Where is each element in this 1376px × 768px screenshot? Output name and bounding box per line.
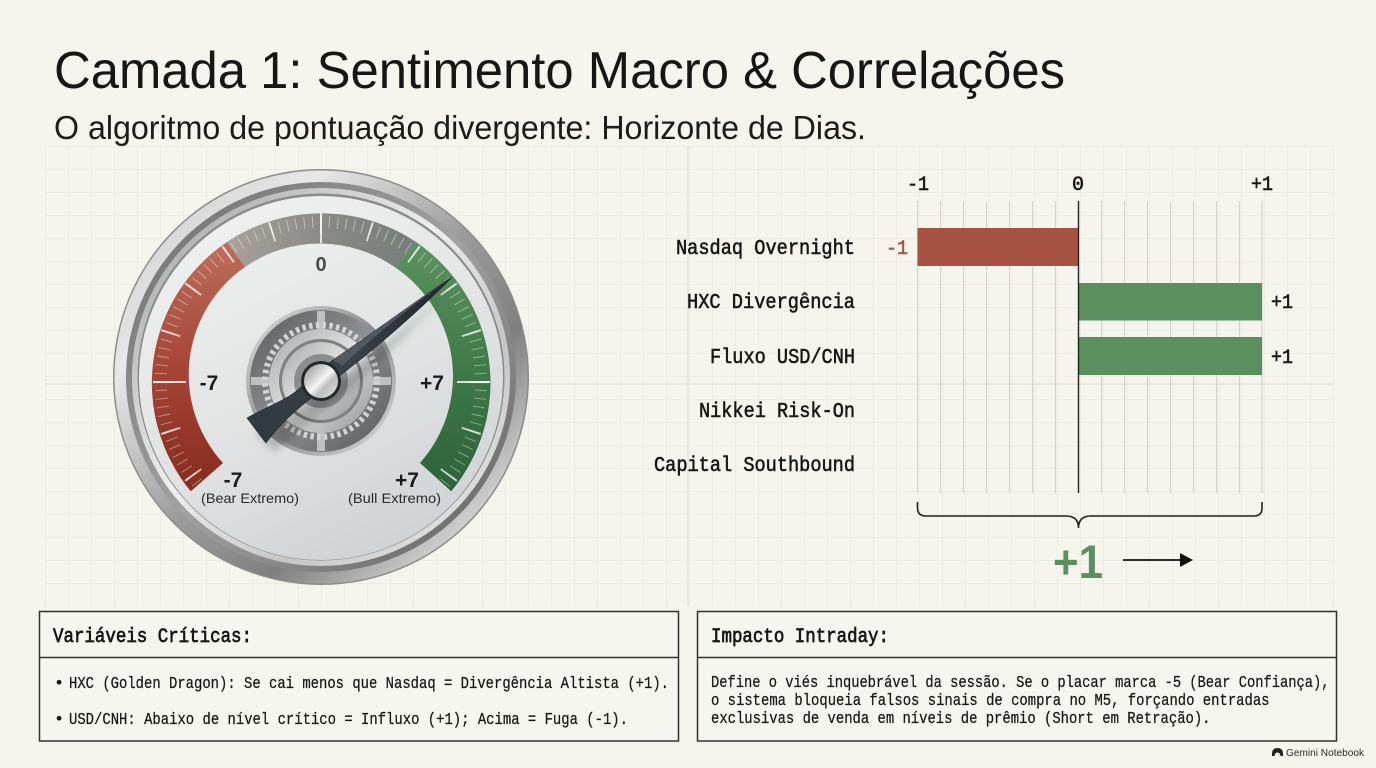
bar: USD/CNH positive: [1078, 337, 1262, 375]
gauge face: [139, 196, 503, 560]
panel heading: impact: Impacto Intraday:: [711, 626, 889, 649]
chart row labels: HXC Divergência: [687, 292, 855, 315]
variables list: •: [54, 675, 64, 694]
variables list: [54, 675, 669, 730]
chart: score bars: [654, 174, 1293, 588]
impact paragraph: o sistema bloqueia falsos sinais de compra no M5, forçando entradas: [711, 692, 1270, 711]
chart row labels: Nikkei Risk-On: [699, 401, 855, 424]
chart axis labels: -1: [907, 174, 929, 197]
gauge tick marks: [153, 213, 490, 485]
gauge central gear mechanism: [246, 306, 396, 456]
panel heading: variables: Variáveis Críticas:: [53, 626, 252, 649]
gauge labels: (Bear Extremo): [201, 490, 299, 506]
gauge labels: -7: [224, 469, 242, 492]
chart row labels: Nasdaq Overnight: [676, 238, 855, 261]
panel: intraday impact: [698, 612, 1336, 741]
gauge labels: +7: [395, 469, 419, 492]
chart value labels: [886, 238, 1293, 370]
chart sum brace: [918, 502, 1262, 528]
chart zero axis: [1078, 201, 1080, 493]
gauge zone: bear red: [152, 242, 245, 491]
chart value labels: -1: [886, 238, 908, 261]
gauge needle: [247, 277, 452, 443]
panel: critical variables: [40, 612, 678, 741]
gauge metal rim: [113, 169, 529, 585]
gauge labels: [200, 254, 444, 506]
bar: Nasdaq negative: [918, 228, 1078, 266]
variables list: HXC (Golden Dragon): Se cai menos que Nasdaq = Divergência Altista (+1).: [69, 675, 669, 694]
gauge labels: (Bull Extremo): [348, 490, 441, 506]
chart row labels: Fluxo USD/CNH: [710, 347, 855, 370]
impact paragraph: exclusivas de venda em níveis de prêmio (Short em Retração).: [711, 710, 1210, 729]
chart gridlines: [918, 201, 1262, 493]
chart axis labels: +1: [1251, 174, 1273, 197]
impact paragraph: [711, 674, 1330, 729]
gauge zone: neutral gray: [227, 213, 416, 268]
chart value labels: +1: [1271, 347, 1293, 370]
variables list: •: [54, 711, 64, 730]
gauge hub cap: [301, 361, 341, 401]
gauge zone: bull green: [396, 242, 490, 491]
gauge: sentiment dial: [113, 169, 529, 585]
arrow: bullish direction: [1123, 553, 1193, 567]
gauge labels: -7: [200, 372, 218, 395]
background grid: [45, 146, 1335, 606]
bar: HXC positive: [1078, 283, 1262, 320]
chart axis labels: [907, 174, 1273, 197]
chart axis labels: 0: [1072, 174, 1084, 197]
gauge labels: 0: [315, 254, 327, 276]
chart value labels: +1: [1271, 292, 1293, 315]
title: Camada 1: Sentimento Macro & Correlações: [54, 42, 1065, 100]
chart row labels: Capital Southbound: [654, 455, 855, 478]
total score: +1: [1053, 535, 1103, 588]
gauge needle shadow: [255, 290, 450, 452]
subtitle: O algoritmo de pontuação divergente: Horizonte de Dias.: [54, 109, 866, 146]
chart row labels: [654, 238, 855, 478]
variables list: USD/CNH: Abaixo de nível crítico = Influxo (+1); Acima = Fuga (-1).: [69, 711, 628, 730]
watermark: Gemini Notebook: Gemini Notebook: [1286, 747, 1365, 759]
gauge labels: +7: [420, 372, 444, 395]
